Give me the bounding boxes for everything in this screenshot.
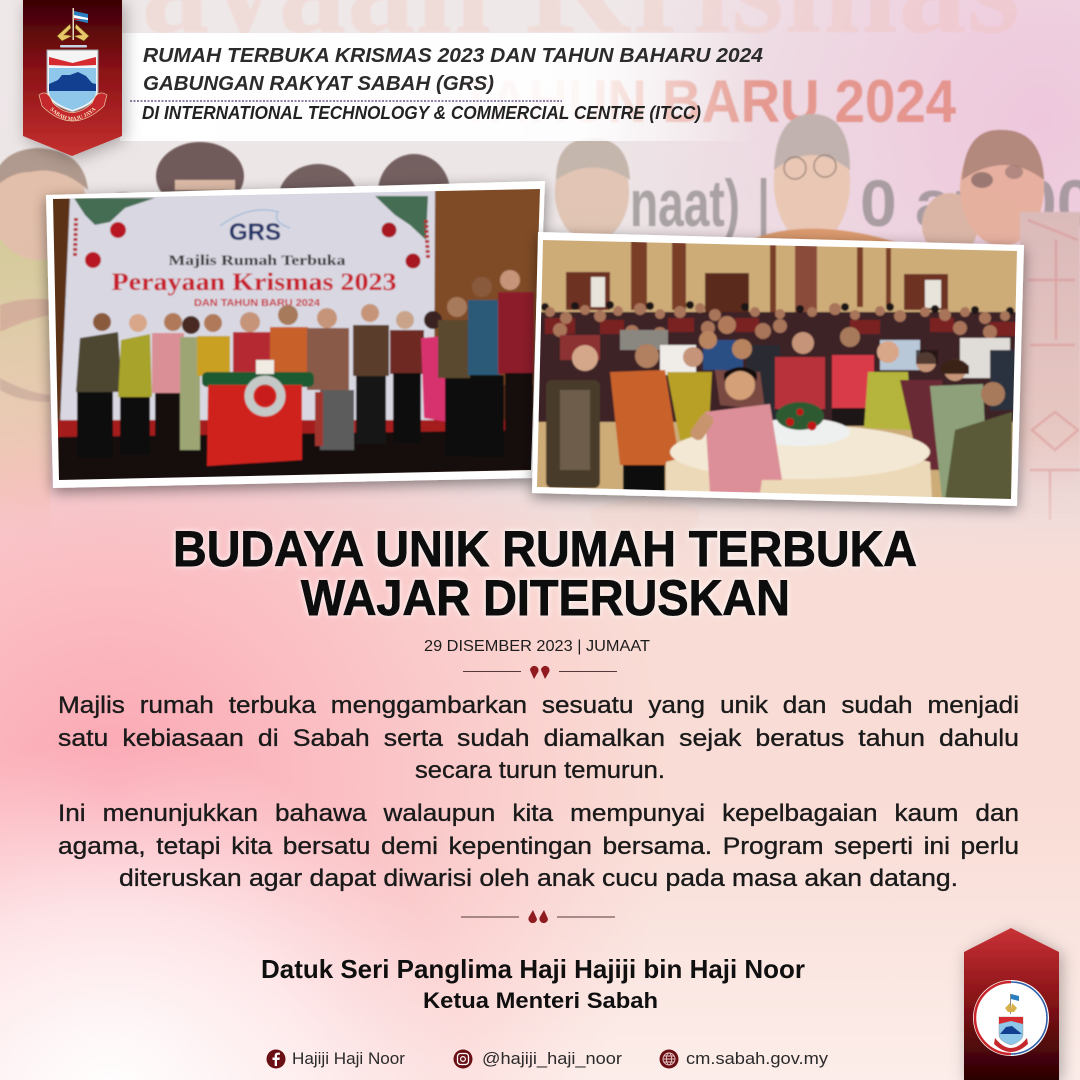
social links: cm.sabah.gov.my — [686, 1049, 829, 1068]
faded event photo in background — [0, 0, 1080, 560]
social links: @hajiji_haji_noor — [482, 1049, 622, 1068]
top ribbon with Sabah crest — [16, 0, 134, 166]
header title: RUMAH TERBUKA KRISMAS 2023 DAN TAHUN BAHARU 2024 — [143, 45, 763, 67]
photo 1: cake cutting on stage: Majlis Rumah Terbuka — [168, 253, 346, 269]
header title: DI INTERNATIONAL TECHNOLOGY & COMMERCIAL CENTRE (ITCC) — [142, 103, 701, 123]
photo 2: guests waving at the banquet — [530, 232, 1030, 506]
main heading — [173, 521, 917, 626]
red cake table with wreath — [202, 360, 314, 466]
quote body text: agama, tetapi kita bersatu demi kepentingan bersama. Program seperti ini perlu — [58, 833, 1019, 860]
faded event photo in background: 0 ar — [860, 166, 977, 240]
banquet table — [666, 402, 932, 498]
photo 1: cake cutting on stage: DAN TAHUN BARU 2024 — [194, 298, 320, 309]
date: 29 DISEMBER 2023 | JUMAAT — [424, 638, 651, 655]
header title: GABUNGAN RAKYAT SABAH (GRS) — [143, 73, 494, 95]
icon: facebook — [266, 1050, 286, 1068]
speaker name: Datuk Seri Panglima Haji Hajiji bin Haji Noor — [261, 954, 805, 984]
main heading: BUDAYA UNIK RUMAH TERBUKA — [173, 521, 917, 577]
faded event photo in background: naat) — [630, 166, 740, 240]
opening quote divider — [463, 666, 617, 679]
faded event photo in background: | — [755, 166, 772, 240]
quote body text: Ini menunjukkan bahawa walaupun kita mempunyai kepelbagaian kaum dan — [58, 800, 1019, 827]
quote body text: satu kebiasaan di Sabah serta sudah diamalkan sejak beratus tahun dahulu — [58, 725, 1019, 752]
photo 1: cake cutting on stage: GRS — [229, 219, 281, 246]
icon: instagram — [454, 1050, 472, 1068]
social links: Hajiji Haji Noor — [292, 1049, 405, 1068]
foreground guests — [546, 327, 1012, 500]
speaker name — [261, 954, 805, 1013]
crowd — [536, 301, 1022, 422]
bottom ribbon with emblem — [964, 928, 1059, 1080]
group of dignitaries — [76, 270, 534, 458]
social links — [266, 1049, 829, 1068]
festive decorations — [74, 196, 428, 268]
icon: Sabah crest: SABAH MAJU JAYA — [50, 108, 96, 121]
quote body text: Majlis rumah terbuka menggambarkan sesuatu yang unik dan sudah menjadi — [58, 692, 1019, 719]
background people — [156, 142, 244, 210]
main heading: WAJAR DITERUSKAN — [301, 570, 790, 626]
icon: globe — [660, 1050, 678, 1068]
photo 1: cake cutting on stage: Perayaan Krismas 2023 — [112, 269, 396, 296]
quote body text: diteruskan agar dapat diwarisi oleh anak cucu pada masa akan datang. — [119, 865, 958, 892]
photo 1: cake cutting on stage — [40, 180, 550, 490]
faded event photo in background: TAHUN BARU 2024 — [460, 68, 957, 135]
quote body text: secara turun temurun. — [415, 757, 665, 784]
closing quote divider — [461, 910, 615, 923]
faded event photo in background: 00 — [105, 178, 178, 252]
header banner — [120, 33, 763, 141]
icon: Sabah crest — [38, 8, 108, 122]
speaker name: Ketua Menteri Sabah — [423, 988, 658, 1013]
hall wall, columns and doors — [566, 240, 948, 315]
pink shirt man in front — [688, 367, 782, 493]
icon: round emblem — [973, 980, 1049, 1056]
quote body text — [58, 692, 1019, 892]
header title — [142, 45, 763, 123]
